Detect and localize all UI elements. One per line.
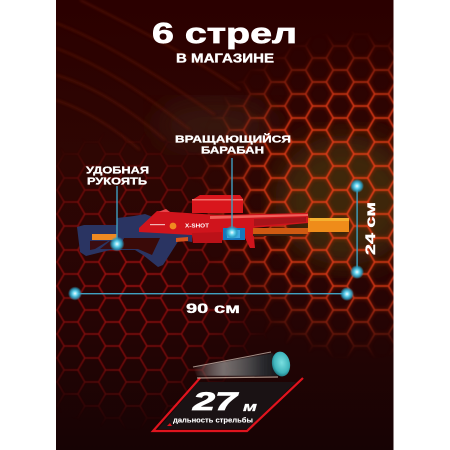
logo [170,223,176,229]
orange underbarrel [253,228,308,234]
label: comfortable grip: УДОБНАЯ [86,164,149,176]
label: rotating drum: ВРАЩАЮЩИЙСЯ [175,132,291,146]
range unit: м [243,399,258,414]
dimension: height 24 cm: 24 см [362,202,378,255]
label: comfortable grip [86,164,149,188]
blaster illustration [77,195,349,267]
label: rotating drum: БАРАБАН [201,144,264,156]
blaster illustration: X-SHOT [185,224,209,230]
range caption: дальность стрельбы [173,416,253,424]
label: rotating drum [175,132,291,156]
stock and grip [77,214,192,267]
range value: 27 [191,388,239,416]
dimension: length 90 cm: 90 см [186,300,240,316]
dimension: height 24 cm [350,179,378,279]
range badge [153,378,303,431]
red body [139,211,308,248]
callout dot: grip [110,236,124,252]
blue cylinder [223,228,245,240]
callout dot: drum [225,226,239,240]
callout line: drum [231,158,233,232]
stock magazine [92,234,117,240]
scope [192,195,243,213]
subtitle: В МАГАЗИНЕ [176,52,274,66]
panel: hexagon background [56,0,415,450]
title: 6 стрел [152,18,297,50]
label: comfortable grip: РУКОЯТЬ [87,176,148,188]
orange barrel tip [308,218,349,232]
dimension: length 90 cm [68,286,354,316]
icon: flying dart [193,350,292,378]
callout line: grip [116,186,118,244]
